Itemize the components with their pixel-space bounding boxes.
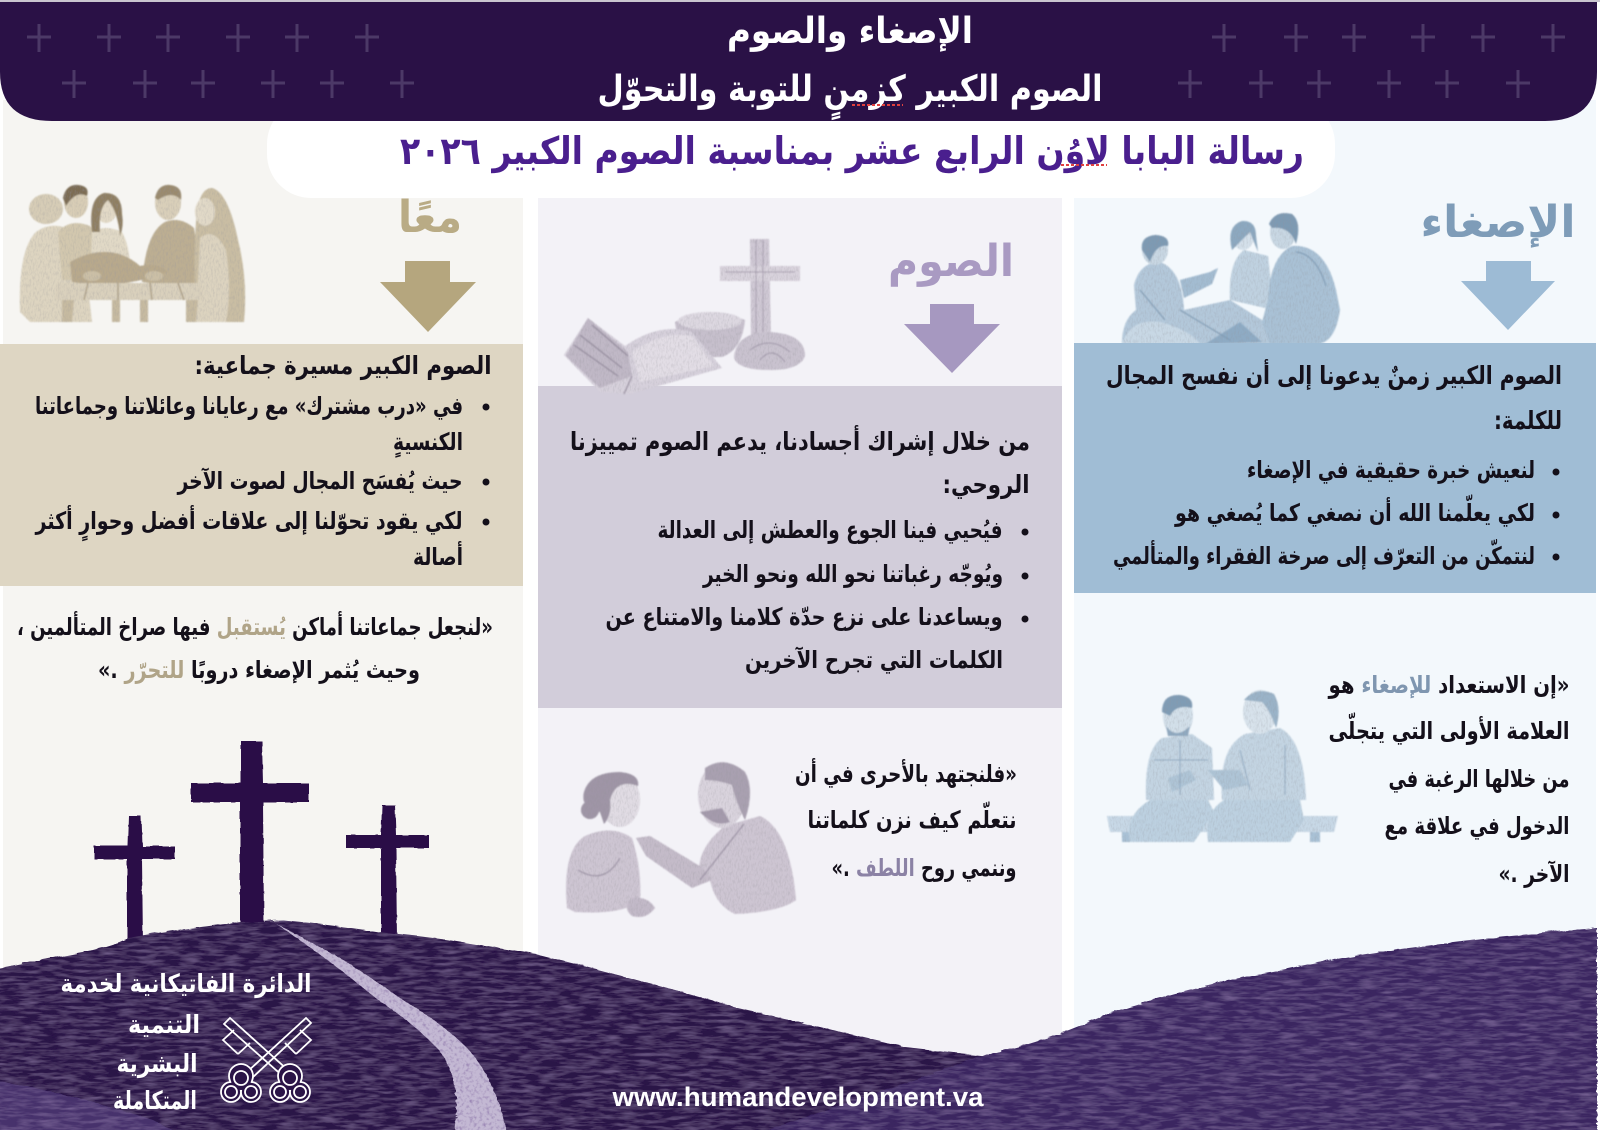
arrow <box>1461 261 1555 330</box>
content band <box>538 386 1062 708</box>
bullet list: الكنسيةٍ <box>393 428 463 458</box>
bullet list: لكي يقود تحوّلنا إلى علاقات أفضل وحوارٍ أكثر <box>35 505 463 541</box>
lower right hill edge over left hill <box>700 1056 1000 1130</box>
subtitle pill <box>267 100 1335 198</box>
bullet list: فيُحيي فينا الجوع والعطش إلى العدالة <box>658 516 1002 544</box>
quote: «فلنجتهد بالأحرى في أن <box>795 758 1017 788</box>
quote: «لنجعل جماعاتنا أماكن يُستقبل فيها صراخ المتألمين ، <box>17 611 493 641</box>
spell-check squiggle <box>852 104 903 106</box>
header banner <box>0 0 1600 121</box>
illustration: book bowl bread cross <box>564 239 805 394</box>
lower-left swirl <box>0 1080 230 1130</box>
hills <box>0 920 1597 1130</box>
bullet list: أصالة <box>413 541 463 571</box>
quote: الآخر .» <box>1498 860 1570 888</box>
heading: الإصغاء: الإصغاء <box>1420 197 1576 248</box>
panel: الصوم column background <box>538 190 1062 1130</box>
road <box>275 923 510 1130</box>
illustration: two men on a bench <box>1107 690 1338 842</box>
band heading: الصوم الكبير مسيرة جماعية: <box>194 351 492 381</box>
left hill <box>0 920 985 1130</box>
footer text: الدائرة الفاتيكانية لخدمة <box>60 969 312 999</box>
arrow <box>380 261 476 332</box>
band heading: من خلال إشراك أجسادنا، يدعم الصوم تمييزنا <box>570 425 1030 457</box>
content band: للكلمة: <box>1494 406 1562 435</box>
quote: نتعلّم كيف نزن كلماتنا <box>808 802 1016 834</box>
panel: معا <box>0 185 523 684</box>
panel: الإصغاء <box>1074 197 1596 888</box>
bullet list: ويساعدنا على نزع حدّة كلامنا والامتناع عن <box>606 603 1002 631</box>
content band <box>0 344 523 586</box>
footer text: المتكاملة <box>113 1086 197 1115</box>
website url: www.humandevelopment.va <box>611 1082 985 1112</box>
panel: الإصغاء column background <box>1074 100 1596 1130</box>
bullet list <box>35 392 490 571</box>
footer text: التنمية <box>128 1010 200 1039</box>
illustration: man comforting woman <box>566 762 796 917</box>
bullet list <box>1113 456 1560 570</box>
quote: «إن الاستعداد للإصغاء هو <box>1328 671 1570 699</box>
quote <box>795 758 1017 882</box>
quote: وحيث يُثمر الإصغاء دروبًا للتحرّر .» <box>98 656 420 684</box>
illustration: three crosses <box>94 741 429 945</box>
right hill <box>700 928 1597 1130</box>
bullet list: في «درب مشترك» مع رعايانا وعائلاتنا وجماعاتنا <box>35 392 463 420</box>
title line 2: الصوم الكبير كزمنٍ للتوبة والتحوّل <box>598 69 1102 121</box>
bullet list: حيث يُفسَح المجال لصوت الآخر <box>177 467 462 495</box>
content band <box>1074 343 1596 593</box>
icon: crossed keys <box>221 1018 311 1102</box>
title line 1: الإصغاء والصوم <box>727 11 973 52</box>
footer text <box>60 969 312 1115</box>
heading: الصوم: الصوم <box>888 236 1014 287</box>
arrow <box>904 304 1000 373</box>
illustration: three people on ground <box>1122 213 1340 344</box>
bullet list <box>606 516 1028 674</box>
quote <box>1328 671 1570 888</box>
subtitle text: رسالة البابا لاوُن الرابع عشر بمناسبة الصوم الكبير ٢٠٢٦ <box>400 129 1304 174</box>
quote <box>17 611 493 684</box>
bullet list: الكلمات التي تجرح الآخرين <box>745 646 1003 674</box>
content band: الروحي: <box>942 470 1030 500</box>
illustration: people at table <box>20 185 245 322</box>
bullet list: ويُوجّه رغباتنا نحو الله ونحو الخير <box>702 560 1003 588</box>
panel: معا column background <box>3 100 523 1130</box>
plus pattern <box>27 24 1565 98</box>
heading: معا: معًا <box>398 192 462 243</box>
panel: الصوم <box>538 236 1062 917</box>
footer text: البشرية <box>116 1049 198 1079</box>
quote: وننمي روح اللطف .» <box>831 854 1016 882</box>
